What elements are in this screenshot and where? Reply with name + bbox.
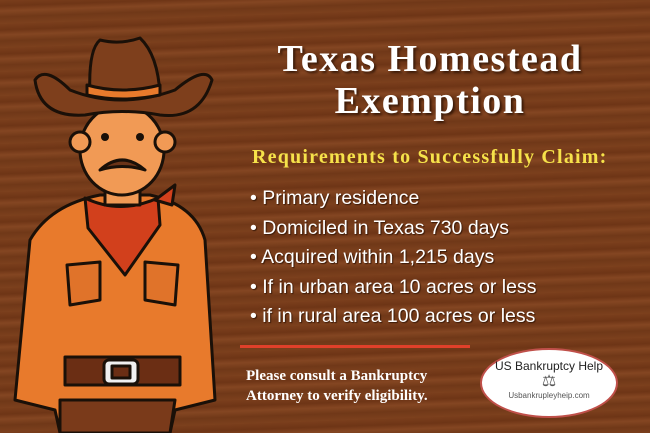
hat (90, 38, 160, 95)
logo badge (480, 348, 618, 418)
logo badge: Usbankrupleyheip.com (508, 391, 590, 400)
title: Texas Homestead (277, 38, 583, 80)
consult text: Attorney to verify eligibility. (246, 388, 428, 404)
bullet list (250, 187, 538, 327)
divider red line (240, 345, 470, 348)
bandana (85, 198, 160, 275)
bullet list: • if in rural area 100 acres or less (250, 305, 535, 327)
bullet list: • If in urban area 10 acres or less (250, 276, 536, 298)
neck/face (105, 180, 140, 205)
pockets (67, 262, 100, 305)
subtitle: Requirements to Successfully Claim: (252, 146, 608, 168)
belt (65, 357, 180, 385)
consult text: Please consult a Bankruptcy (246, 368, 427, 384)
title (277, 38, 583, 124)
bullet list: • Acquired within 1,215 days (250, 246, 494, 268)
bullet list: • Primary residence (250, 187, 419, 209)
logo badge: US Bankruptcy Help (495, 359, 603, 373)
consult text (246, 368, 428, 404)
body (15, 195, 215, 433)
bullet list: • Domiciled in Texas 730 days (250, 216, 509, 238)
logo badge: ⚖ (542, 373, 556, 390)
cowboy illustration (14, 36, 216, 433)
title: Exemption (335, 80, 525, 122)
